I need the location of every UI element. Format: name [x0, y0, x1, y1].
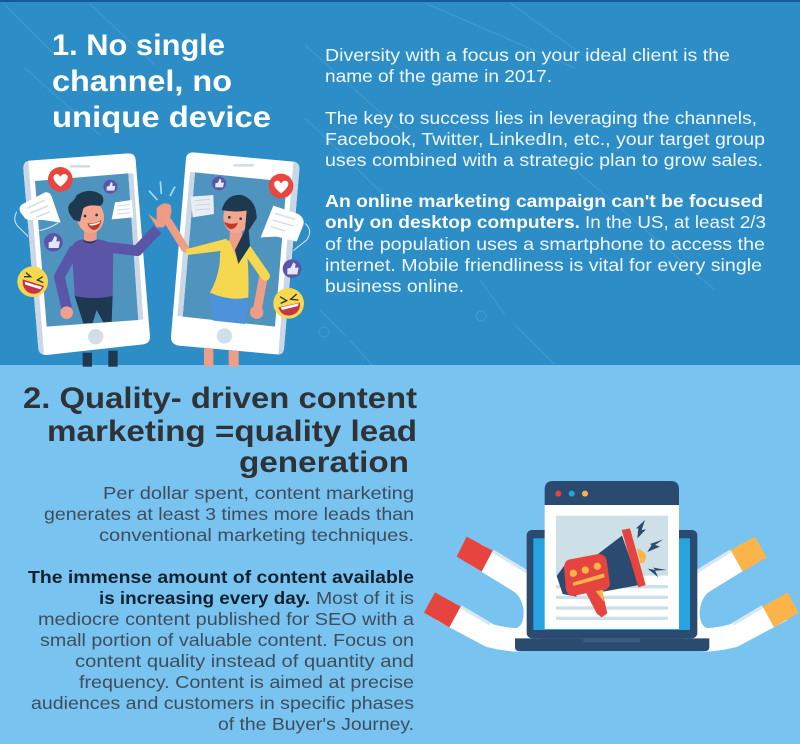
illustration: two people high-fiving from phones — [15, 152, 310, 367]
text block: section 2 body: frequency. Content is aimed at precise — [79, 672, 414, 692]
text block: section 2 body: audiences and customers in specific phases — [31, 693, 414, 713]
icon: left magnet — [424, 537, 535, 640]
text block: section 2 body: of the Buyer's Journey. — [218, 714, 414, 734]
text block: section 1 body — [325, 45, 766, 296]
text block: section 1 body: internet. Mobile friendliness is vital for every single — [325, 255, 762, 275]
illustration: laptop, magnets and megaphone — [424, 481, 799, 651]
icon: megaphone — [557, 520, 667, 617]
icon: man — [59, 191, 171, 367]
text block: section 2 body: content quality instead of quantity and — [75, 651, 414, 671]
panel: section 1 background — [0, 0, 800, 365]
icon: laptop — [515, 530, 709, 651]
icon: speech bubbles — [15, 192, 310, 251]
text block: section 1 body: Facebook, Twitter, LinkedIn, etc., your target group — [325, 129, 765, 149]
heading: section 1 title: channel, no — [52, 65, 232, 98]
icon: like badges — [44, 176, 301, 278]
text block: section 2 body — [28, 483, 414, 734]
heading: section 1 title: 1. No single — [52, 29, 225, 62]
heading: section 2 title: marketing =quality lead — [47, 415, 417, 448]
icon: right phone — [171, 152, 299, 354]
text block: section 1 body: only on desktop computers. — [325, 212, 580, 232]
text block: section 2 body: Most of it is — [316, 588, 414, 608]
icon: browser window — [545, 481, 679, 629]
icon: right magnet — [688, 537, 799, 640]
text block: section 2 body: is increasing every day. — [99, 588, 310, 608]
text block: section 1 body: In the US, at least 2/3 — [585, 212, 766, 232]
icon: left phone — [23, 153, 150, 355]
text block: section 1 body: uses combined with a strategic plan to grow sales. — [325, 150, 763, 170]
icon: woman — [168, 195, 265, 367]
text block: section 1 body: An online marketing campaign can't be focused — [325, 191, 763, 211]
heading: section 1 title — [52, 29, 271, 134]
icon: laughing emojis — [17, 266, 304, 319]
text block: section 2 body: Per dollar spent, content marketing — [103, 483, 414, 503]
text block: section 2 body: generates at least 3 times more leads than — [44, 504, 414, 524]
text block: section 1 body: of the population uses a smartphone to access the — [325, 234, 765, 254]
text block: section 2 body: mediocre content published for SEO with a — [38, 609, 414, 629]
text block: section 2 body: conventional marketing techniques. — [99, 525, 414, 545]
text block: section 1 body: Diversity with a focus on your ideal client is the — [325, 45, 730, 65]
text block: section 1 body: business online. — [325, 276, 464, 296]
heading: section 2 title: generation — [239, 446, 409, 479]
text block: section 2 body: small portion of valuable content. Focus on — [40, 630, 414, 650]
text block: section 1 body: name of the game in 2017. — [325, 66, 552, 86]
heading: section 2 title — [23, 382, 417, 479]
icon: high-five sparks — [149, 181, 175, 200]
icon: hearts — [48, 167, 293, 198]
heading: section 2 title: 2. Quality- driven content — [23, 382, 417, 415]
text block: section 1 body: The key to success lies in leveraging the channels, — [325, 108, 757, 128]
heading: section 1 title: unique device — [52, 101, 271, 134]
text block: section 2 body: The immense amount of content available — [28, 567, 414, 587]
